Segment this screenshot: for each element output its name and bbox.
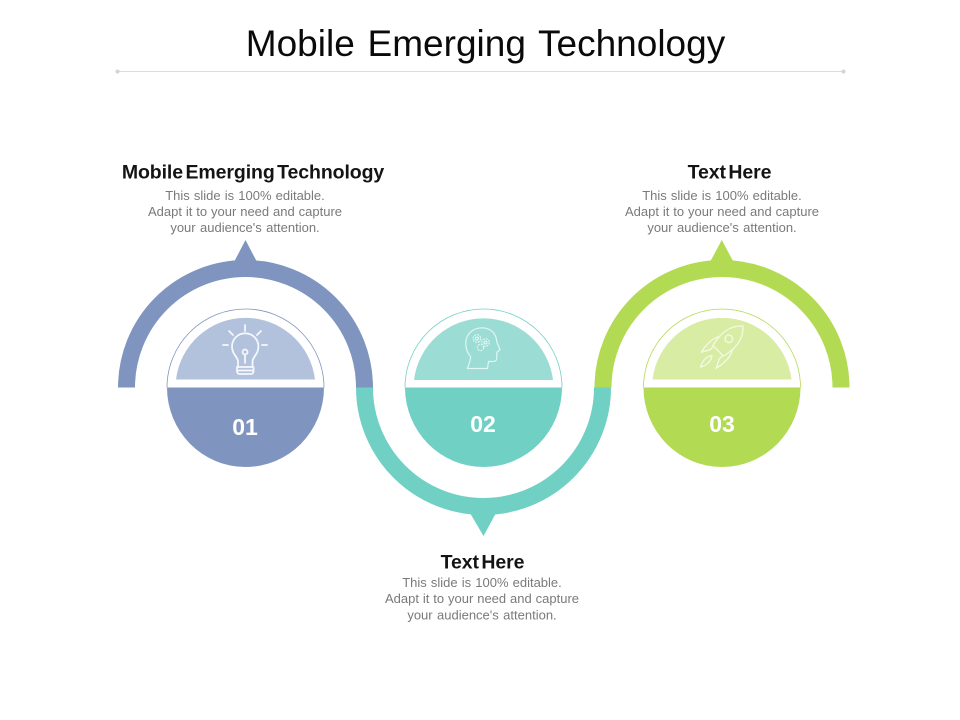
text block 2: your audience's attention. — [407, 608, 557, 622]
panel 3: circle — [644, 309, 800, 467]
number 01: 01 — [232, 414, 258, 440]
text block 1: Adapt it to your need and capture — [148, 204, 342, 219]
text block 2: Adapt it to your need and capture — [385, 591, 579, 606]
connector arc 3 — [603, 240, 841, 388]
text block 3: Adapt it to your need and capture — [625, 204, 819, 219]
text block 3: This slide is 100% editable. — [642, 188, 802, 203]
text block 2: Text Here — [441, 552, 525, 574]
panel 1: circle — [167, 309, 324, 467]
text block 1: Mobile Emerging Technology — [122, 162, 384, 184]
text block 1: This slide is 100% editable. — [165, 188, 325, 203]
panel 2: circle — [405, 309, 562, 467]
icon: rocket — [693, 317, 752, 376]
text block 2 — [385, 552, 579, 622]
number 03: 03 — [709, 411, 735, 437]
connector arc 1 — [126, 240, 364, 388]
icon: light bulb — [223, 325, 267, 374]
title: Mobile Emerging Technology — [246, 23, 726, 64]
connector arc 2 — [364, 388, 602, 536]
text block 1 — [122, 162, 384, 235]
text block 3: Text Here — [688, 162, 772, 184]
number 02: 02 — [470, 411, 496, 437]
text block 3: your audience's attention. — [647, 220, 797, 235]
text block 3 — [625, 162, 819, 235]
icon: head with gears — [466, 328, 500, 368]
text block 2: This slide is 100% editable. — [402, 575, 562, 590]
text block 1: your audience's attention. — [170, 220, 320, 235]
